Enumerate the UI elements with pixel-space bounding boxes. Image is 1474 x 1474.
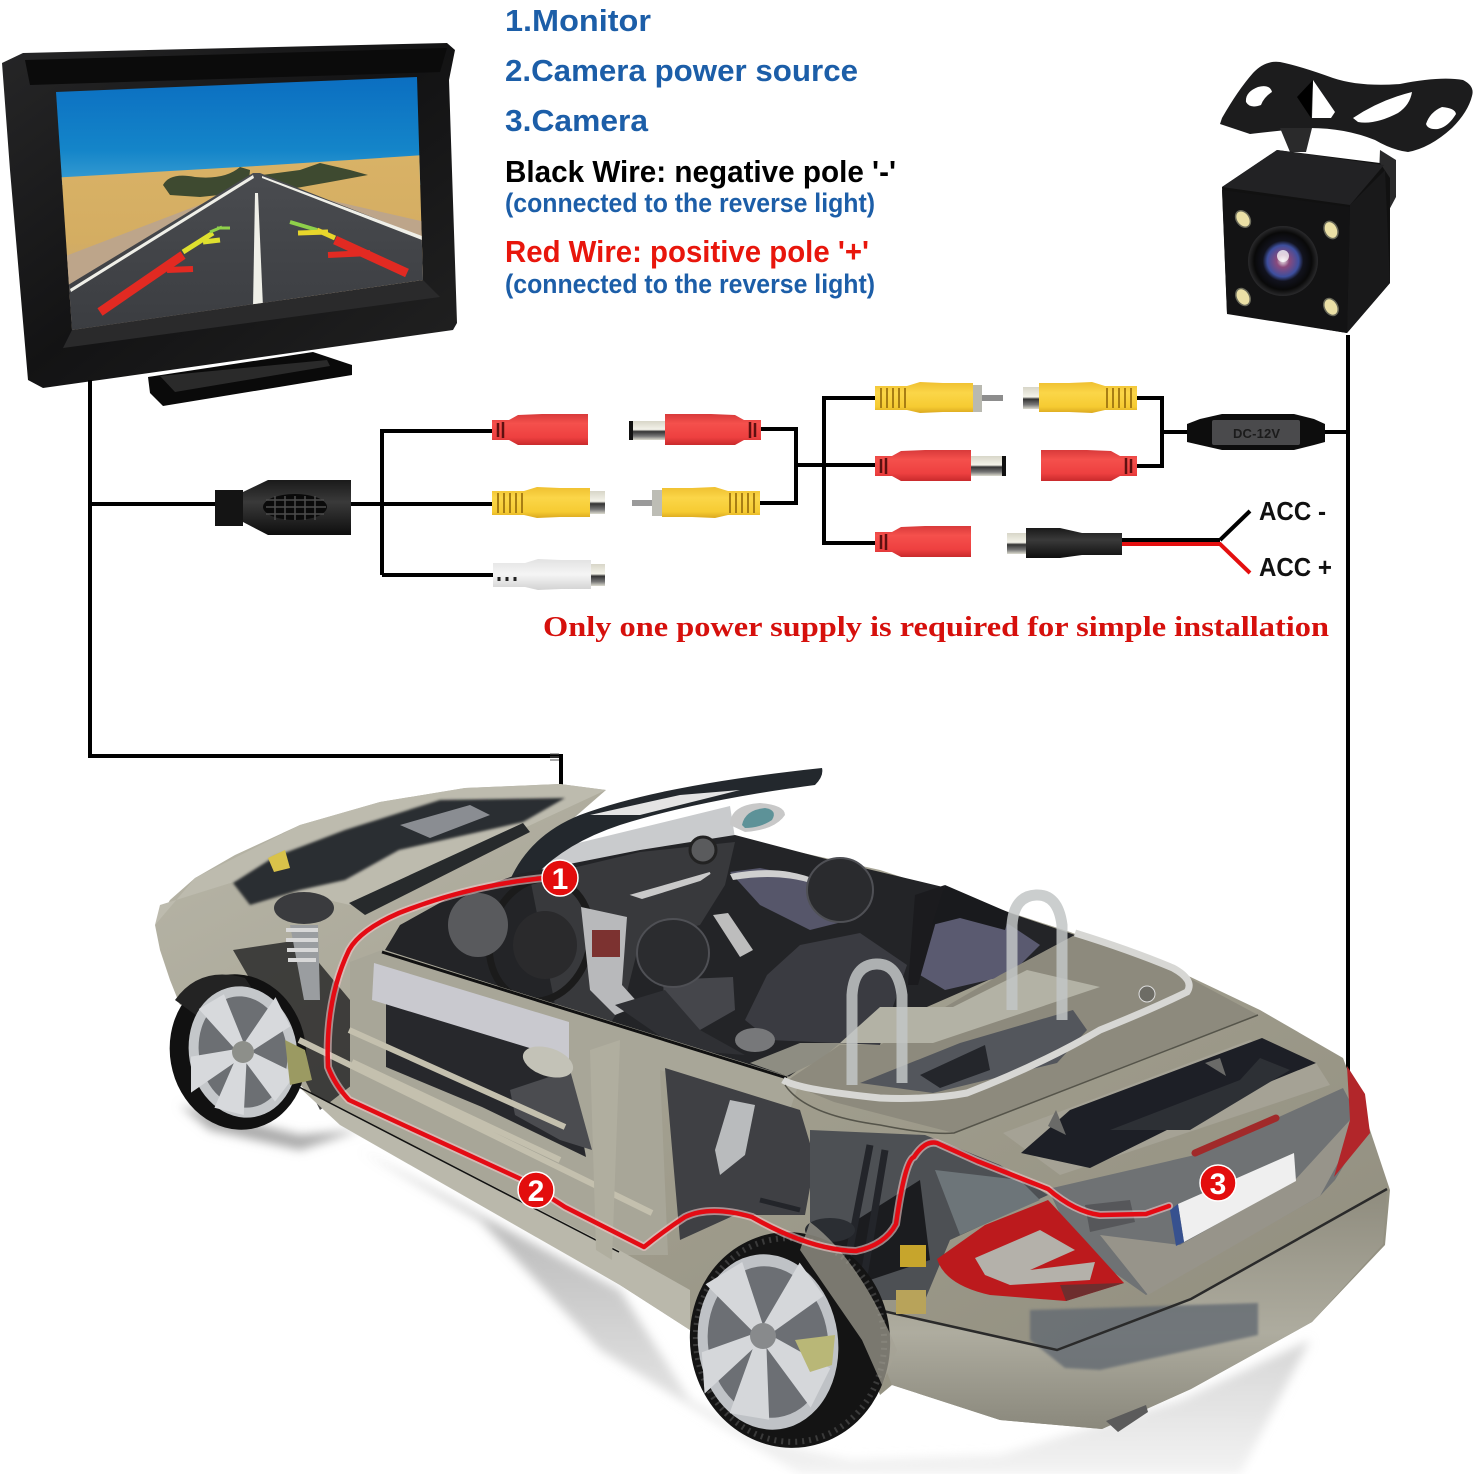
ACC plus label: ACC + xyxy=(1259,552,1332,582)
camera front face xyxy=(1222,190,1350,333)
door card xyxy=(730,868,872,930)
ACC minus label: ACC - xyxy=(1259,496,1326,526)
right tail light xyxy=(1334,1066,1370,1177)
ACC pair wire xyxy=(1122,540,1250,573)
monitor screen xyxy=(50,70,430,340)
front wheel xyxy=(157,963,319,1141)
door and side panel xyxy=(299,950,815,1330)
rear quarter interior xyxy=(665,1068,815,1240)
rear bench xyxy=(920,905,1040,990)
rear wheel xyxy=(676,1219,904,1461)
side rods xyxy=(299,1030,652,1213)
glass wedges xyxy=(840,970,1100,1043)
wire marker 3 xyxy=(1200,1165,1236,1201)
dash trim xyxy=(633,873,710,898)
red wire label: Red Wire: positive pole '+' xyxy=(505,234,869,269)
instrument cluster xyxy=(448,893,508,957)
monitor body xyxy=(2,43,457,388)
black ACC plug xyxy=(1007,528,1122,558)
camera bracket xyxy=(1220,62,1473,152)
fuse block xyxy=(900,1245,926,1267)
seatbelt tower xyxy=(908,885,945,985)
rear speakers xyxy=(735,1028,775,1052)
side mirror xyxy=(730,803,785,832)
camera lens xyxy=(1248,226,1318,296)
bumper dark reflection xyxy=(1030,1303,1258,1370)
door interior xyxy=(386,997,586,1157)
wire marker 2: 2 xyxy=(528,1175,544,1208)
camera housing xyxy=(1222,150,1390,333)
deck badge xyxy=(1139,986,1155,1002)
windshield frame xyxy=(510,768,822,882)
red cable route xyxy=(328,878,1169,1251)
tonneau deck xyxy=(783,895,1258,1133)
wire marker 1: 1 xyxy=(552,863,568,896)
camera LEDs xyxy=(1233,208,1341,318)
engine bay xyxy=(233,798,565,905)
camera hinge xyxy=(1378,150,1396,212)
black wire label: Black Wire: negative pole '-' xyxy=(505,154,896,189)
red female plug C xyxy=(875,526,971,557)
ground shadow xyxy=(180,1105,1310,1474)
yellow male plug B xyxy=(875,382,1003,413)
dash vent xyxy=(690,837,716,863)
door handle xyxy=(519,1041,577,1083)
white female plug xyxy=(493,559,605,590)
monitor xyxy=(2,43,457,406)
pedal bracket xyxy=(715,1100,755,1175)
monitor stand xyxy=(148,352,352,406)
legend item 3: 3.Camera xyxy=(505,103,649,138)
DC-12V module xyxy=(1187,414,1325,450)
yellow female plug A xyxy=(492,487,605,518)
cowl strip xyxy=(349,823,530,915)
camera xyxy=(1220,62,1473,333)
yellow male plug A xyxy=(632,487,760,518)
rear suspension bay xyxy=(760,1130,1048,1314)
windshield glass xyxy=(530,806,735,878)
steering wheel xyxy=(476,867,604,1013)
bumper chrome line xyxy=(856,1189,1387,1350)
sill xyxy=(299,1087,690,1330)
third brake light xyxy=(1195,1118,1276,1153)
badge xyxy=(1085,1200,1135,1232)
red wire note: (connected to the reverse light) xyxy=(505,269,875,299)
door seat xyxy=(510,1070,592,1150)
deck outer edge xyxy=(785,1015,1258,1133)
wire marker 3: 3 xyxy=(1210,1168,1226,1201)
red female plug A xyxy=(492,414,588,445)
car body xyxy=(155,784,1390,1429)
license plate xyxy=(1178,1153,1296,1242)
monitor lower bezel xyxy=(63,280,440,348)
terminal clip xyxy=(550,754,559,760)
legend item 1: 1.Monitor xyxy=(505,3,651,38)
camera mount xyxy=(1280,128,1312,152)
red female plug B xyxy=(1041,450,1137,481)
DC-12V module: DC-12V xyxy=(1233,426,1280,441)
rear seat xyxy=(745,858,907,1045)
wire marker 1 xyxy=(542,860,578,896)
deck silver trim xyxy=(783,933,1189,1098)
wiring harness xyxy=(90,335,1348,1183)
exhaust xyxy=(1106,1405,1148,1432)
wire marker 2 xyxy=(518,1172,554,1208)
trunk lid xyxy=(1048,1088,1365,1295)
monitor connector xyxy=(215,480,351,535)
black wires xyxy=(90,335,1348,1183)
yellow female plug B xyxy=(1023,382,1137,413)
rear shelf xyxy=(750,1043,840,1076)
legend item 2: 2.Camera power source xyxy=(505,53,858,88)
roll bar mechanism xyxy=(860,1010,1087,1093)
car cutaway xyxy=(155,768,1390,1474)
belt line xyxy=(382,952,787,1078)
left tail light xyxy=(937,1200,1124,1301)
red male plug B xyxy=(875,450,1006,481)
dashboard xyxy=(530,842,735,1040)
cockpit interior xyxy=(385,835,1075,1078)
front roll bar xyxy=(852,964,902,1085)
hood xyxy=(155,784,606,925)
trunk opening xyxy=(1003,1038,1330,1175)
rear bumper xyxy=(856,1189,1387,1429)
red male plug A xyxy=(629,414,761,445)
black wire note: (connected to the reverse light) xyxy=(505,188,875,218)
rear roll bar xyxy=(1012,895,1062,1020)
strut and upper tire xyxy=(233,892,352,1110)
silver plate xyxy=(713,913,753,957)
legend text xyxy=(505,3,896,299)
front seat xyxy=(615,919,745,1055)
power supply note: Only one power supply is required for simple installation xyxy=(543,612,1329,643)
door window bar xyxy=(372,963,569,1060)
centre stack xyxy=(581,907,640,1015)
